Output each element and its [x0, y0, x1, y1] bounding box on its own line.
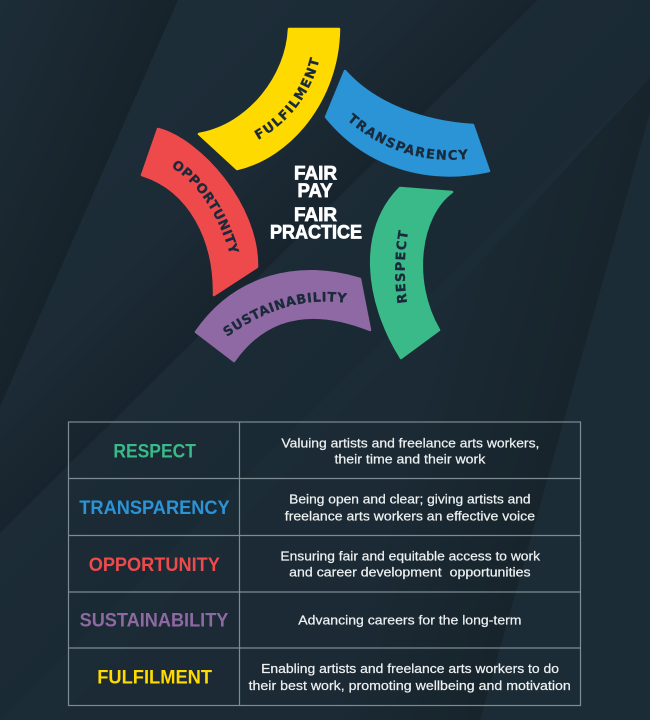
row: fulfilment: FULFILMENT [97, 667, 212, 689]
row: opportunity: and career development opportunities [289, 565, 531, 580]
centre title: PRACTICE [270, 222, 362, 244]
row: opportunity: Ensuring fair and equitable access to work [280, 549, 541, 564]
centre title: FAIR [294, 205, 337, 226]
values table [68, 422, 580, 706]
segment: sustainability: SUSTAINABILITY [223, 292, 348, 336]
row: transparency [79, 492, 535, 524]
centre title [270, 164, 362, 244]
row: transparency: TRANSPARENCY [79, 497, 230, 519]
row: fulfilment: their best work, promoting wellbeing and motivation [249, 678, 571, 693]
row: sustainability: SUSTAINABILITY [80, 609, 228, 631]
row: fulfilment: Enabling artists and freelance arts workers to do [261, 661, 559, 676]
row: opportunity: OPPORTUNITY [89, 554, 220, 576]
row: respect: their time and their work [334, 452, 486, 467]
row: sustainability [80, 609, 521, 631]
segment: sustainability [194, 270, 372, 362]
pentagon wheel diagram [140, 28, 490, 362]
row: sustainability: Advancing careers for the long-term [298, 612, 522, 627]
row: opportunity [89, 549, 541, 580]
segment: respect: RESPECT [395, 230, 408, 304]
row: fulfilment [97, 661, 571, 693]
row: respect: RESPECT [113, 440, 196, 462]
segment: transparency: TRANSPARENCY [349, 112, 468, 160]
segment: opportunity: OPPORTUNITY [173, 160, 240, 252]
segment: opportunity [140, 128, 258, 296]
row: transparency: Being open and clear; giving artists and [289, 492, 531, 507]
row: respect: Valuing artists and freelance arts workers, [281, 436, 539, 451]
segment: fulfilment: FULFILMENT [254, 56, 319, 140]
row: respect [113, 436, 539, 467]
segment: respect [370, 186, 454, 360]
segment: transparency [324, 70, 490, 177]
centre title: PAY [298, 181, 333, 202]
centre title: FAIR [294, 164, 337, 184]
segment: fulfilment [198, 28, 340, 170]
row: transparency: freelance arts workers an effective voice [285, 509, 535, 524]
table grid [68, 422, 580, 706]
